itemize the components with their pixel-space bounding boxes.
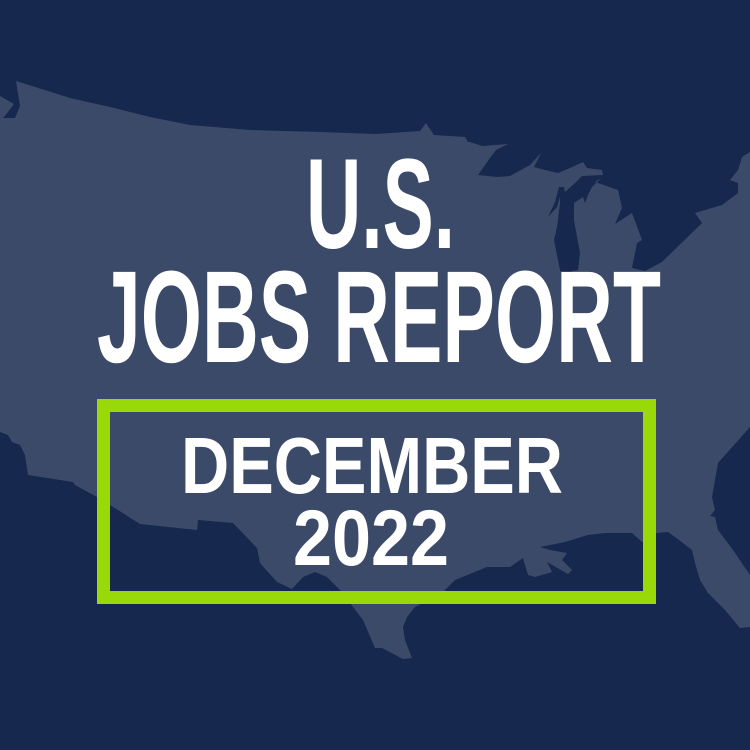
date box: green outline: [104, 406, 650, 598]
map: contiguous United States silhouette: [0, 81, 750, 659]
date line: 2022: 2022: [293, 493, 449, 582]
title: [97, 133, 661, 390]
date line: DECEMBER: DECEMBER: [181, 421, 563, 510]
date text: [181, 421, 563, 582]
title line: U.S.: U.S.: [306, 133, 455, 276]
